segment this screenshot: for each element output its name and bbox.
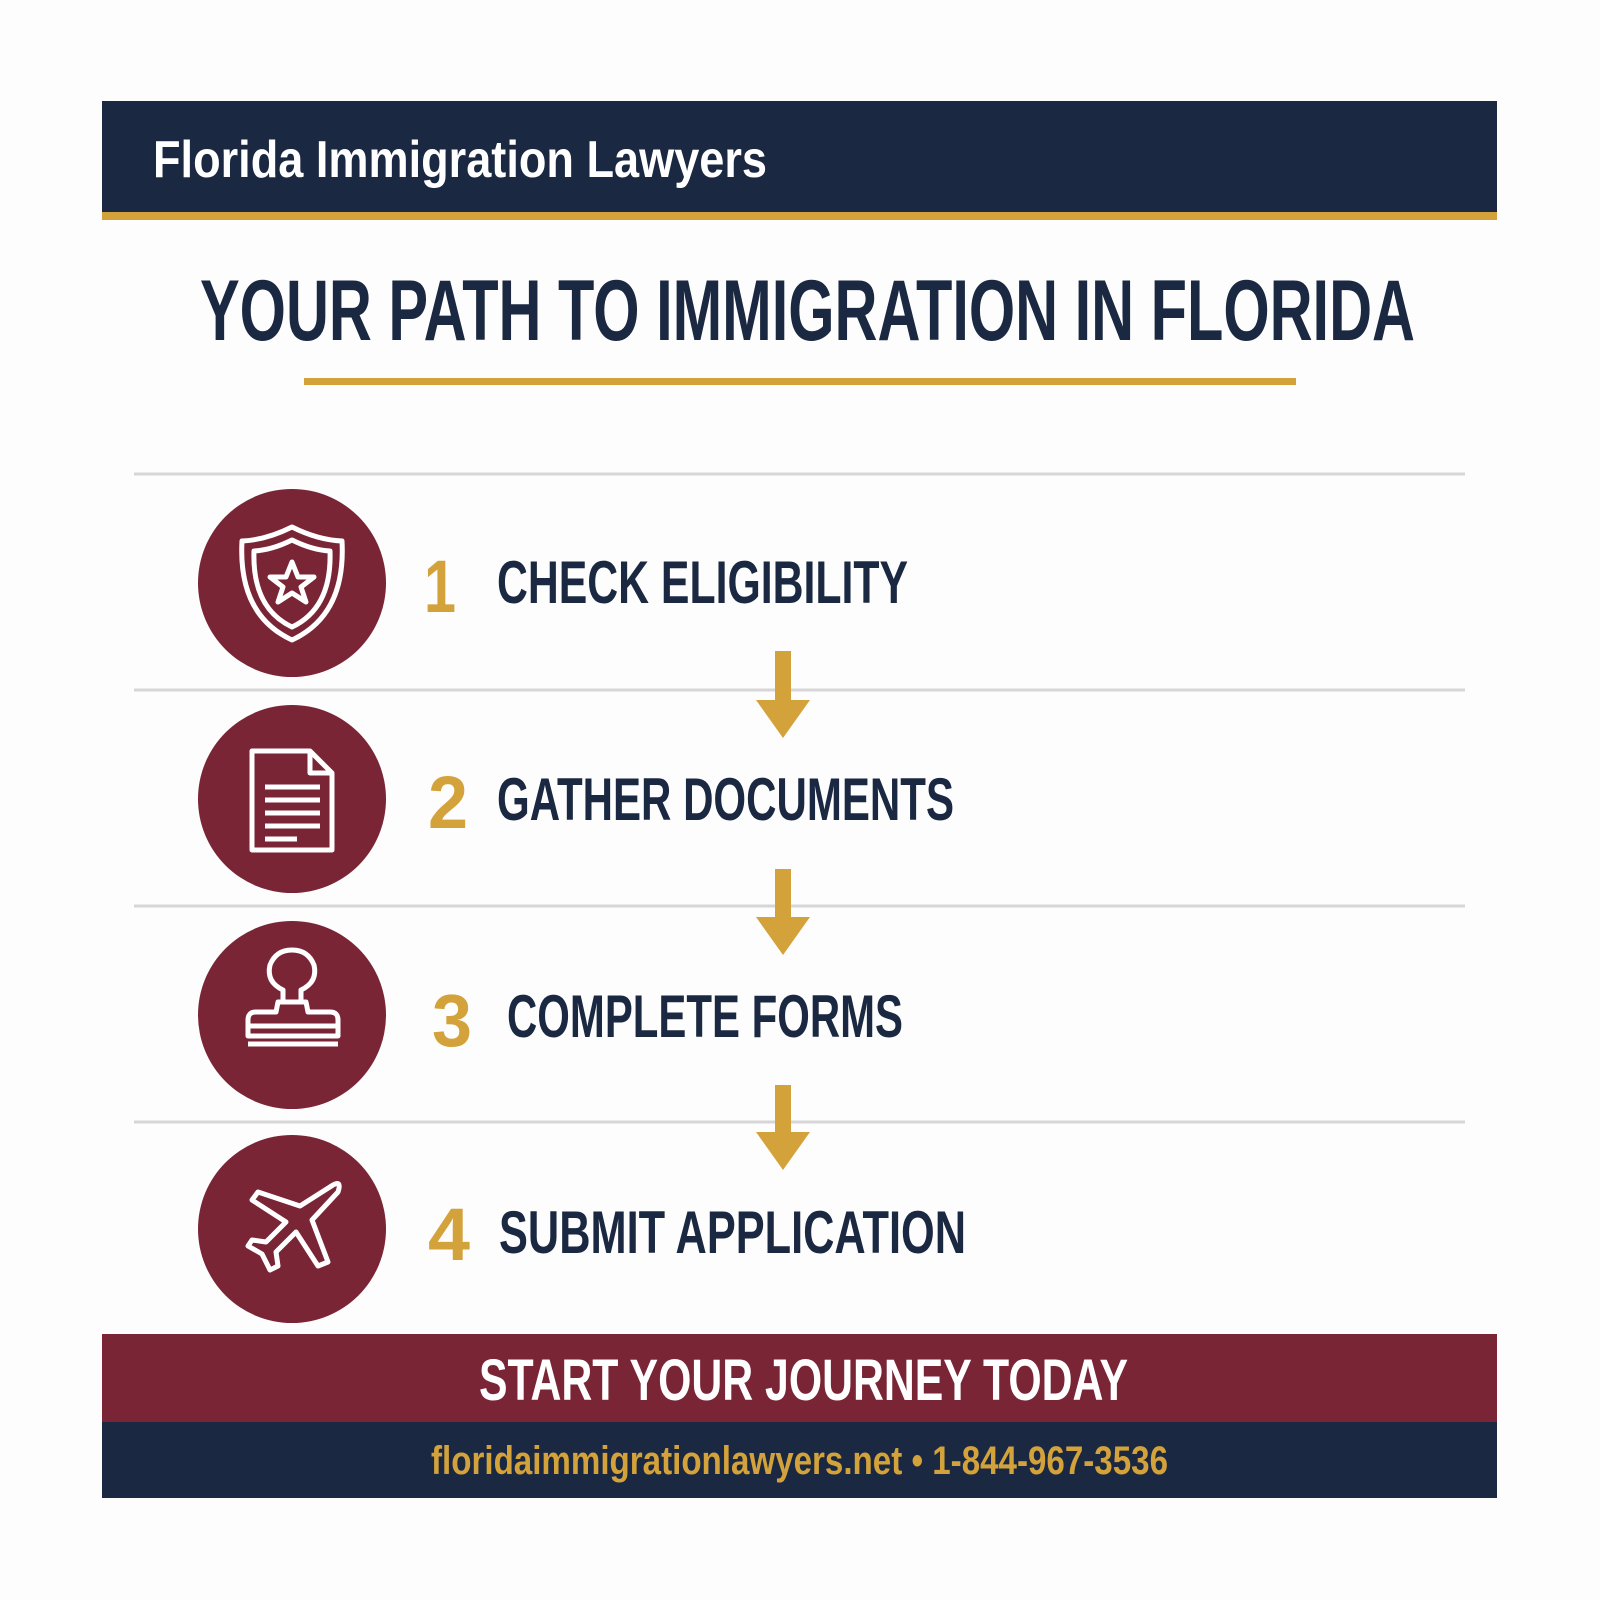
icon: plane: [248, 1184, 339, 1270]
label: CHECK ELIGIBILITY: [497, 549, 908, 616]
step 4: [198, 1135, 966, 1323]
arrow 1: [756, 651, 810, 738]
footer contact bar: floridaimmigrationlawyers.net • 1-844-967-3536: [431, 1439, 1168, 1483]
step 1: [198, 489, 908, 677]
title underline: [304, 378, 1296, 385]
footer CTA bar: START YOUR JOURNEY TODAY: [479, 1348, 1128, 1413]
icon: stamp: [248, 950, 338, 1044]
footer CTA bar: [102, 1334, 1497, 1423]
label: SUBMIT APPLICATION: [499, 1199, 966, 1266]
icon: document: [252, 751, 332, 850]
header bar: [102, 101, 1497, 220]
number 3: 3: [432, 979, 472, 1062]
icon: shield: [242, 527, 342, 640]
arrow 2: [756, 869, 810, 955]
label: COMPLETE FORMS: [507, 983, 903, 1050]
number 1: 1: [424, 545, 456, 628]
label: GATHER DOCUMENTS: [497, 766, 954, 833]
arrow 3: [756, 1085, 810, 1170]
header text: Florida Immigration Lawyers: [153, 131, 767, 189]
number 2: 2: [428, 761, 468, 844]
number 4: 4: [428, 1193, 470, 1276]
step 2: [198, 705, 954, 893]
footer contact bar: [102, 1422, 1497, 1498]
step 3: [198, 921, 903, 1109]
